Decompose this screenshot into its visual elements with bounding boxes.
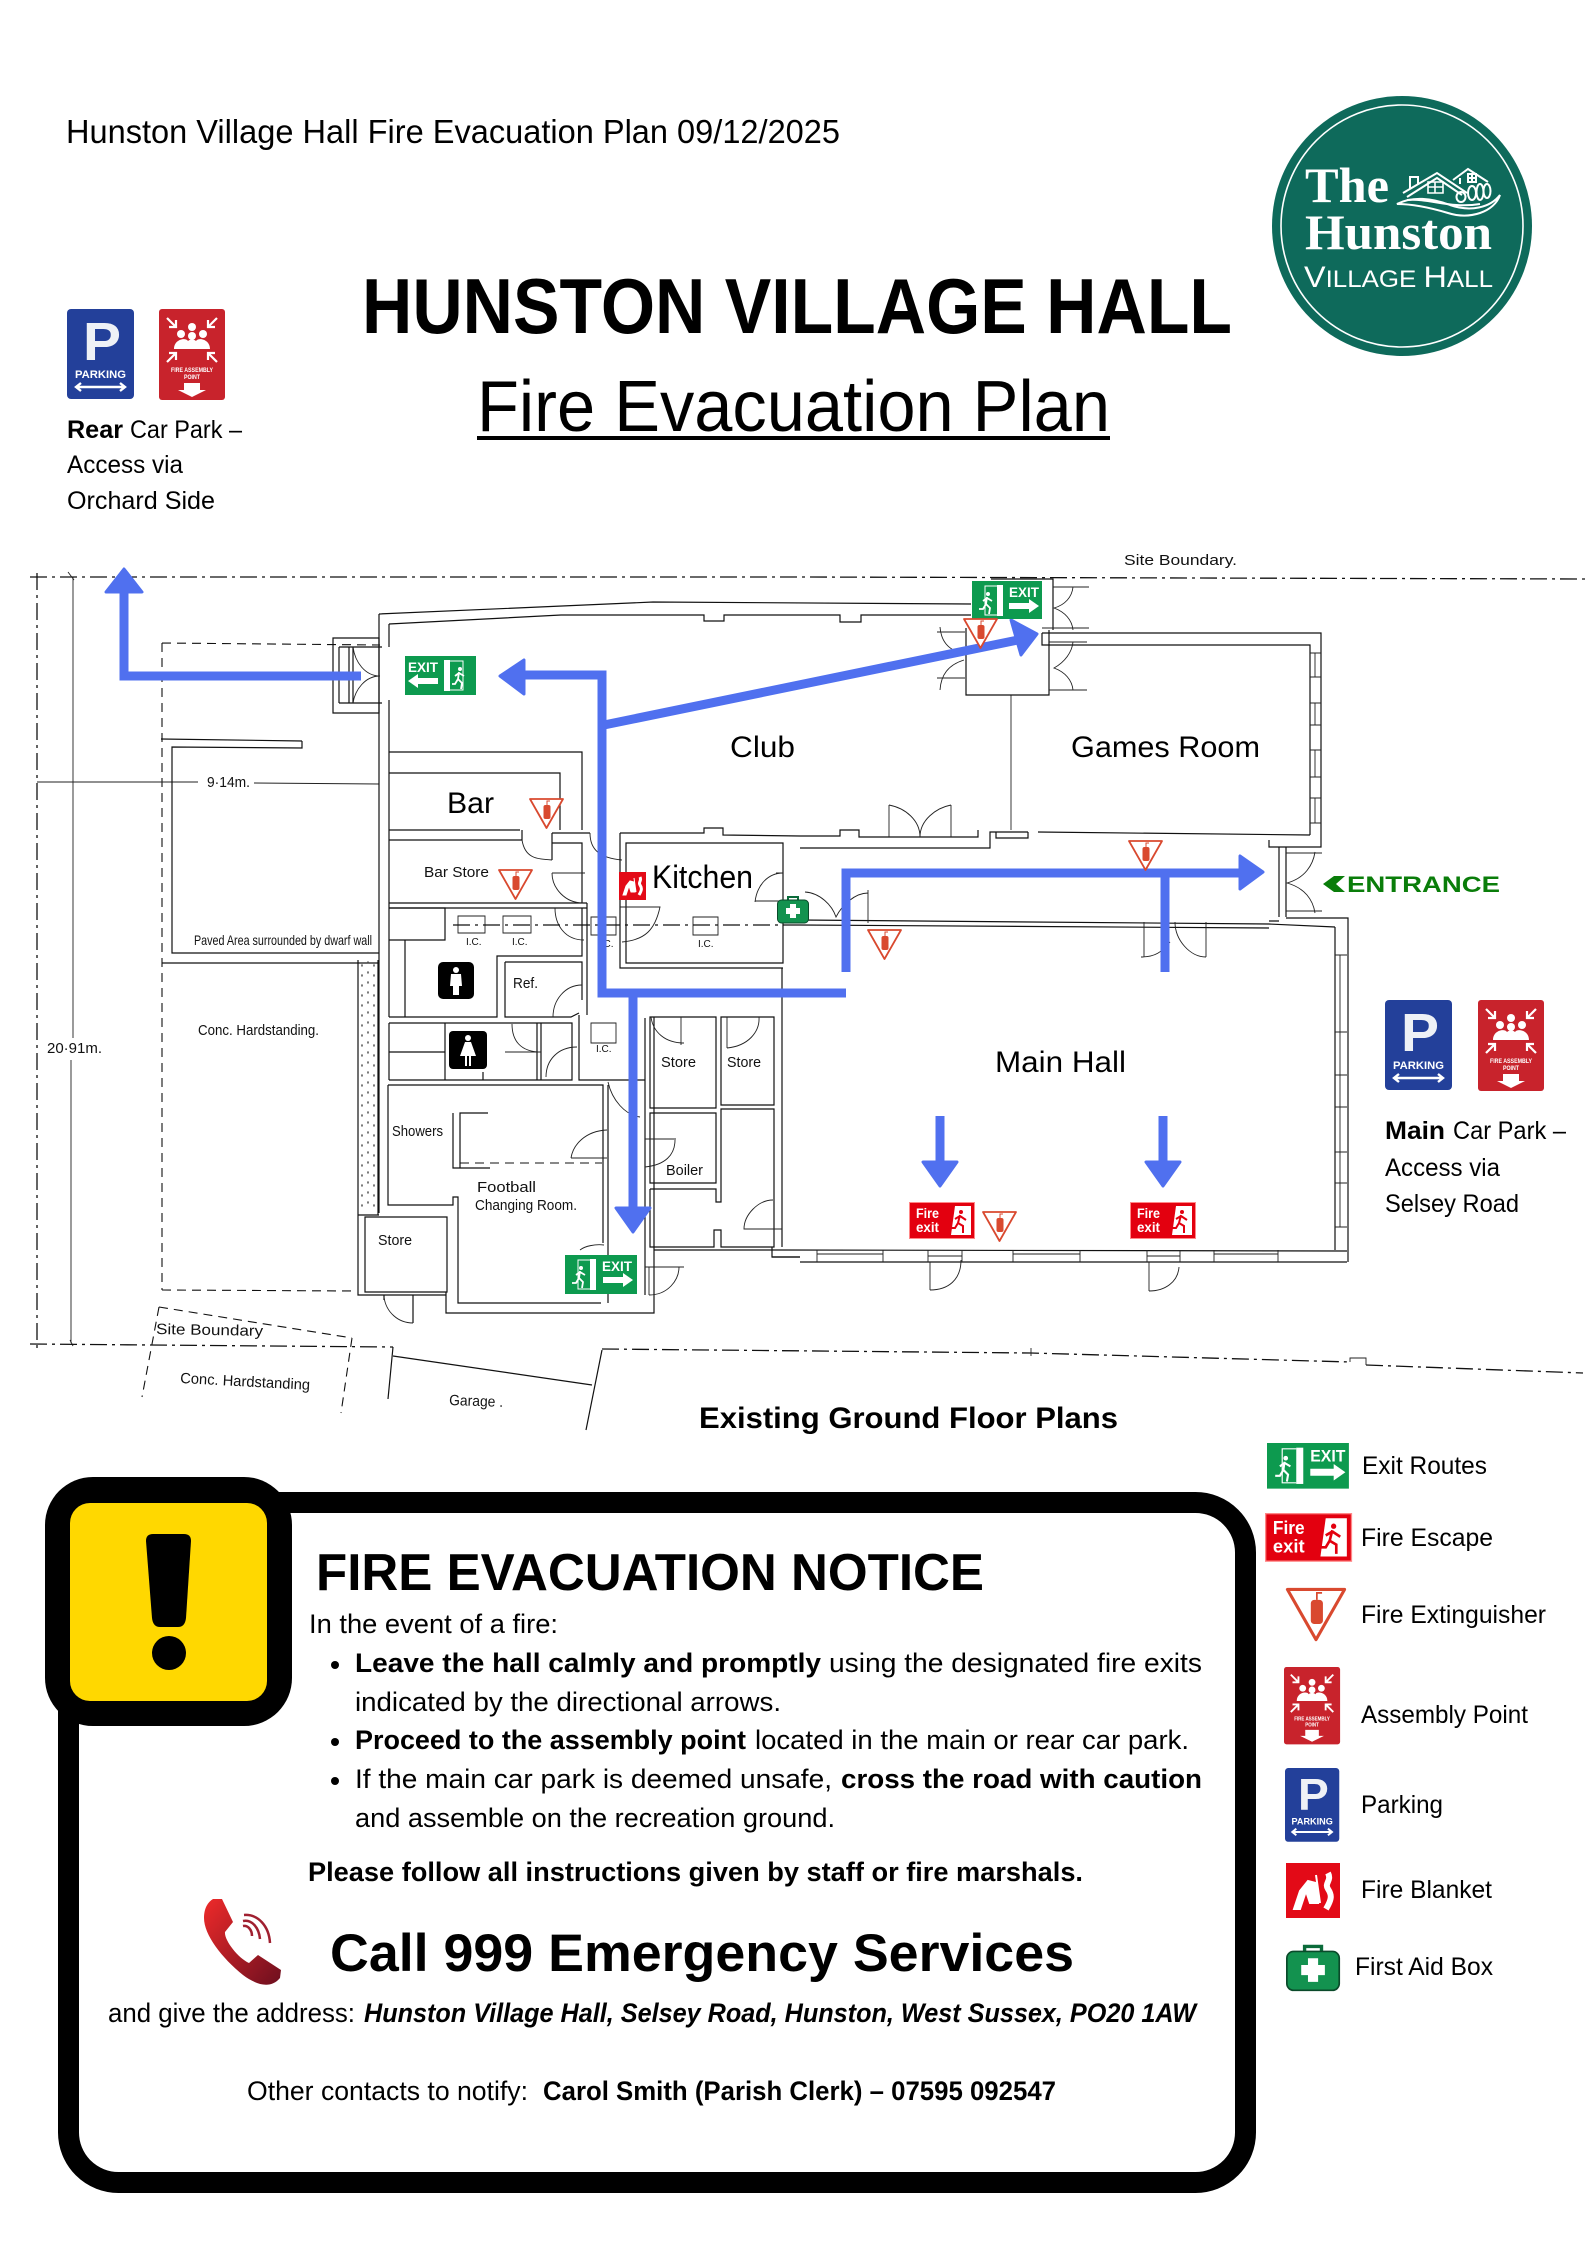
icon: rear car park parking sign: PARKING [75, 369, 126, 381]
legend: fire blanket [1286, 1863, 1492, 1918]
icon: fire exit sign left: exit [916, 1219, 939, 1235]
legend: assembly point: Assembly Point [1361, 1701, 1528, 1729]
icon: first aid box kitchen [778, 897, 808, 923]
logo: The Hunston Village Hall: VILLAGE HALL [1304, 261, 1493, 294]
notice bullet list: located in the main or rear car park. [755, 1725, 1189, 1755]
text: rear car park: Rear [67, 416, 123, 444]
hand lettered plan labels: Boiler [666, 1162, 703, 1179]
hand lettered plan labels: Site Boundary [156, 1321, 264, 1340]
hand lettered plan labels: Site Boundary. [1124, 552, 1237, 569]
other contacts line: Other contacts to notify: [247, 2076, 528, 2106]
icon: fire extinguisher north [964, 619, 997, 648]
room labels: Main Hall [995, 1046, 1126, 1079]
icon: fire exit sign right: Fire [1137, 1205, 1160, 1221]
icon: rear car park assembly point sign [159, 309, 225, 400]
address line: Hunston Village Hall, Selsey Road, Hunston, West Sussex, PO20 1AW [364, 1998, 1198, 2028]
notice bullet list: If the main car park is deemed unsafe, [355, 1764, 832, 1794]
legend [1266, 1443, 1546, 1990]
notice instruction: Please follow all instructions given by staff or fire marshals. [308, 1857, 1083, 1887]
icon: fire extinguisher main hall door [868, 930, 901, 959]
legend: assembly point [1284, 1667, 1528, 1744]
hand lettered plan labels: 20·91m. [47, 1040, 102, 1057]
text: rear car park: Access via [67, 451, 183, 479]
text: main car park: Selsey Road [1385, 1190, 1519, 1218]
main heading: HUNSTON VILLAGE HALL [362, 262, 1232, 350]
text: rear car park [67, 416, 242, 515]
icon: fire exit sign right [1130, 1202, 1196, 1238]
icon: fire extinguisher corridor [1129, 841, 1162, 870]
text: main car park: Main [1385, 1117, 1445, 1145]
building walls [161, 579, 1348, 1323]
room labels: Kitchen [652, 859, 753, 895]
legend: fire escape: Fire Escape [1361, 1524, 1493, 1552]
legend: exit routes: EXIT [1310, 1448, 1345, 1466]
hand lettered plan labels: Store [661, 1054, 696, 1071]
icon: male toilet [438, 962, 474, 999]
legend: parking: P [1298, 1771, 1329, 1820]
floor plan drawing [30, 552, 1587, 1430]
icon: red telephone [204, 1899, 281, 1985]
logo: The Hunston Village Hall: The [1305, 157, 1389, 213]
other contacts line: Carol Smith (Parish Clerk) – 07595 092547 [543, 2076, 1056, 2106]
icon: exit sign west: EXIT [408, 659, 438, 675]
icon: exit sign north: EXIT [1009, 584, 1039, 600]
legend: parking [1285, 1768, 1443, 1842]
hand lettered plan labels: I.C. [466, 937, 482, 948]
legend: first aid box [1287, 1946, 1493, 1990]
hand lettered plan labels: Ref. [513, 975, 538, 992]
entrance label [1323, 872, 1500, 897]
legend: assembly point: POINT [1305, 1722, 1319, 1728]
icon: rear car park parking sign: P [83, 312, 121, 372]
icon: main car park assembly point sign: POINT [1503, 1065, 1519, 1072]
text: main car park [1385, 1117, 1566, 1218]
hand lettered plan labels: I.C. [598, 939, 614, 950]
arrow: down to fire exit left [923, 1116, 957, 1186]
icon: fire blanket kitchen [619, 872, 646, 900]
arrow: down to fire exit right [1146, 1116, 1180, 1186]
hand lettered plan labels: Conc. Hardstanding. [198, 1022, 319, 1039]
hand lettered plan labels: Conc. Hardstanding [180, 1370, 311, 1394]
hand lettered plan labels: Paved Area surrounded by dwarf wall [194, 932, 372, 948]
legend: exit routes: Exit Routes [1362, 1452, 1487, 1480]
text: rear car park: Orchard Side [67, 487, 215, 515]
icon: rear car park assembly point sign: POINT [184, 374, 200, 381]
icon: fire exit sign left: Fire [916, 1205, 939, 1221]
legend: fire blanket: Fire Blanket [1361, 1876, 1492, 1904]
icon: female toilet [449, 1031, 487, 1069]
icon: exit sign north [972, 581, 1042, 619]
arrow: corridor south to exit [616, 996, 650, 1232]
arrow: rear door to car park [106, 569, 361, 676]
legend: parking: Parking [1361, 1791, 1443, 1819]
call 999 heading: Call 999 Emergency Services [330, 1924, 1074, 1983]
header: document title and date: Hunston Village Hall Fire Evacuation Plan 09/12/2025 [66, 113, 840, 150]
arrows: blue evacuation routes [106, 569, 1263, 1232]
hand lettered plan labels: I.C. [512, 937, 528, 948]
hand lettered plan labels: Garage . [449, 1392, 503, 1411]
text: rear car park: Car Park – [130, 416, 242, 444]
notice bullet list: using the designated fire exits [829, 1648, 1202, 1678]
hand lettered plan labels [47, 552, 1237, 1411]
notice heading: FIRE EVACUATION NOTICE [316, 1544, 984, 1602]
icon: main car park assembly point sign: FIRE ASSEMBLY [1490, 1058, 1533, 1065]
legend: parking: PARKING [1291, 1817, 1333, 1827]
address line: and give the address: [108, 1998, 355, 2028]
hand lettered plan labels: Football [477, 1179, 536, 1196]
hand lettered plan labels: Showers [392, 1123, 443, 1140]
arrow: corridor to west exit [500, 660, 846, 993]
legend: fire extinguisher: Fire Extinguisher [1361, 1601, 1546, 1629]
notice bullet list: cross the road with caution [841, 1764, 1202, 1794]
other contacts line [247, 2076, 1056, 2106]
legend: first aid box: First Aid Box [1355, 1953, 1493, 1981]
hand lettered plan labels: I.C. [596, 1044, 612, 1055]
room labels: Games Room [1071, 731, 1260, 764]
text: main car park: Car Park – [1453, 1117, 1566, 1145]
legend: assembly point: FIRE ASSEMBLY [1294, 1717, 1330, 1723]
notice bullet list: and assemble on the recreation ground. [355, 1803, 835, 1833]
icon: fire extinguisher bar [530, 799, 563, 828]
hand lettered plan labels: Store [727, 1054, 761, 1071]
hand lettered plan labels: Bar Store [424, 864, 489, 881]
entrance label: ENTRANCE [1347, 872, 1500, 897]
icon: rear car park assembly point sign: FIRE ASSEMBLY [171, 367, 214, 374]
icon: fire exit sign left [910, 1202, 974, 1238]
icon: exit sign south: EXIT [602, 1258, 632, 1274]
notice bullet list: Leave the hall calmly and promptly [355, 1648, 821, 1678]
icon: houses and trees [1397, 169, 1500, 216]
hand lettered plan labels: Changing Room. [475, 1197, 577, 1214]
arrow: diagonal to north exit [604, 620, 1037, 725]
icon: main car park assembly point sign [1478, 1000, 1544, 1091]
logo: The Hunston Village Hall [1272, 96, 1532, 356]
legend: fire escape: exit [1273, 1536, 1305, 1557]
legend: fire escape: Fire [1273, 1517, 1305, 1538]
hand lettered plan labels: I.C. [698, 939, 714, 950]
notice bullet list [331, 1648, 1202, 1833]
legend: fire escape [1266, 1514, 1493, 1561]
hand lettered plan labels: Store [378, 1232, 412, 1249]
icon: fire exit sign right: exit [1137, 1219, 1160, 1235]
text: main car park: Access via [1385, 1154, 1500, 1182]
logo: The Hunston Village Hall: Hunston [1305, 204, 1492, 260]
icon: main car park parking sign: P [1401, 1003, 1439, 1063]
icon: main car park parking sign [1385, 1000, 1452, 1090]
hand lettered plan labels: 9·14m. [207, 774, 250, 791]
room labels [447, 731, 1260, 1079]
room labels: Bar [447, 787, 494, 820]
icon: fire extinguisher bar store [499, 870, 532, 899]
icon: rear car park parking sign [67, 309, 134, 399]
panel: fire evacuation notice [45, 1477, 1246, 2182]
notice bullet list: Proceed to the assembly point [355, 1725, 746, 1755]
icon: exit sign west [405, 656, 476, 695]
plan caption: Existing Ground Floor Plans [699, 1402, 1118, 1435]
icon: main car park parking sign: PARKING [1393, 1060, 1444, 1072]
icon: warning exclamation [45, 1477, 292, 1726]
notice bullet list: indicated by the directional arrows. [355, 1687, 781, 1717]
legend: exit routes [1267, 1443, 1487, 1489]
room labels: Club [730, 731, 795, 764]
icon: exit sign south [565, 1255, 637, 1294]
icon: fire extinguisher main hall south [983, 1212, 1016, 1241]
subheading: Fire Evacuation Plan: Fire Evacuation Plan [477, 367, 1110, 447]
notice intro: In the event of a fire: [309, 1609, 558, 1639]
site boundary lines [30, 572, 1587, 1430]
arrow: main hall to entrance [846, 856, 1263, 972]
legend: fire extinguisher [1287, 1589, 1546, 1640]
